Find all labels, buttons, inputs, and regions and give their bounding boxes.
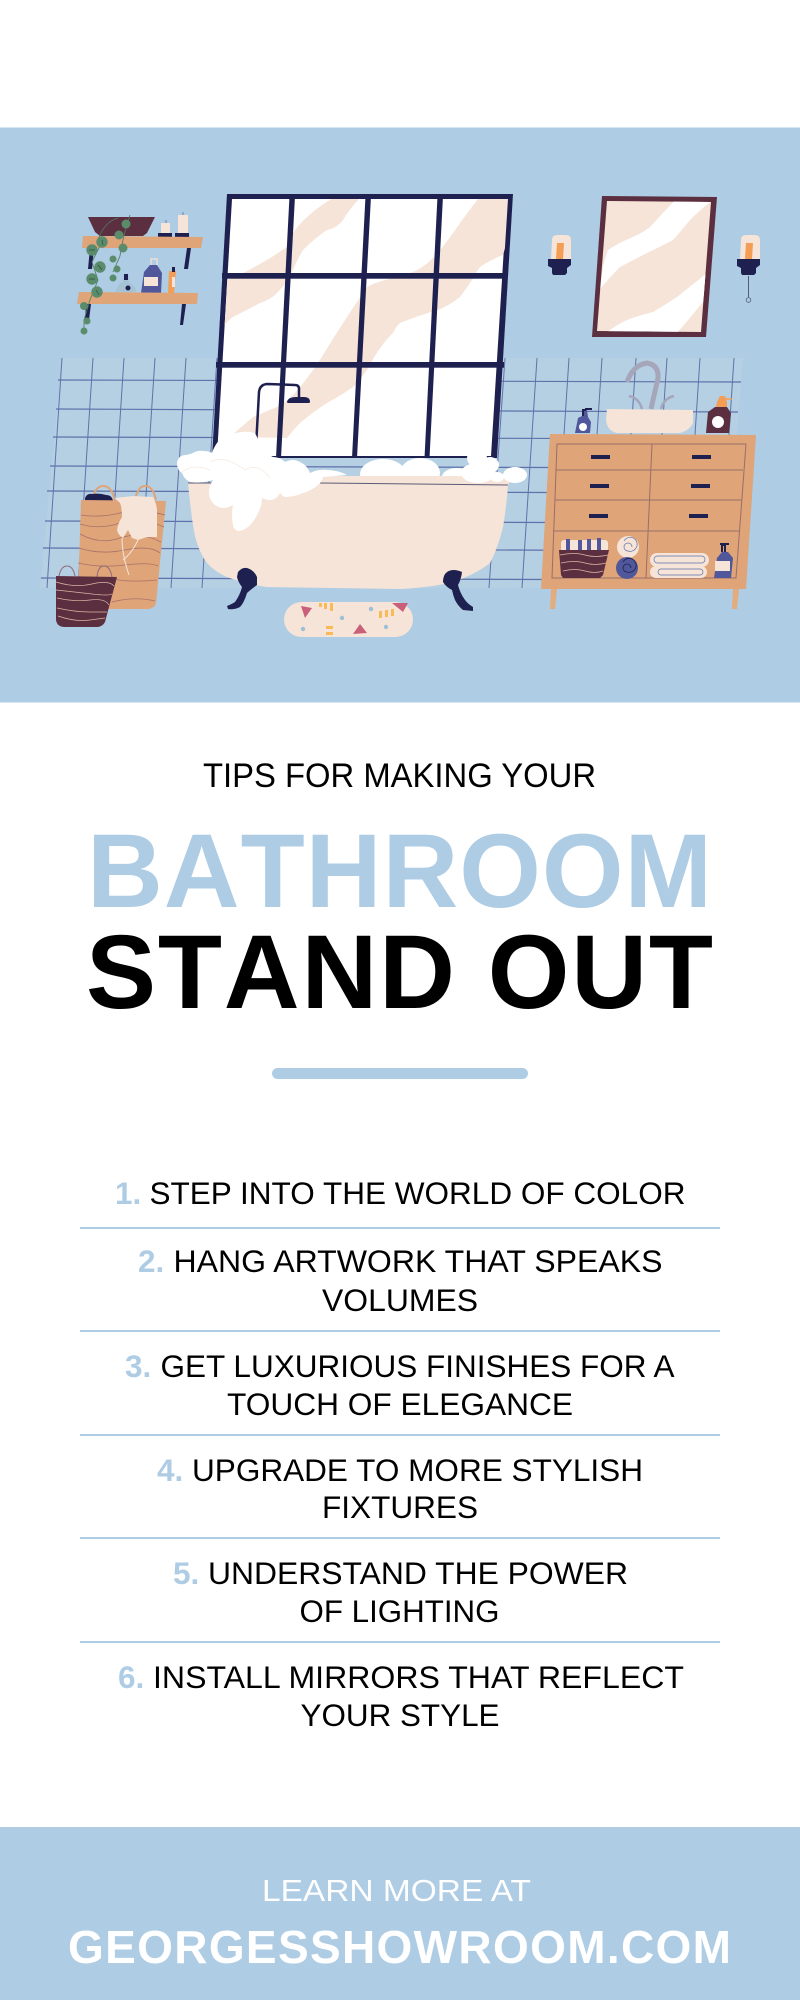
foam behind the rim (360, 449, 499, 489)
foam on the tub (177, 432, 527, 531)
tip 3 (125, 1348, 674, 1422)
wall mirror (592, 196, 717, 337)
footer label: LEARN MORE AT (262, 1873, 531, 1908)
faucet (627, 363, 674, 409)
footer website: GEORGESSHOWROOM.COM (68, 1921, 731, 1973)
tip 2: VOLUMES (322, 1282, 478, 1318)
tip 1: 1. (115, 1175, 141, 1211)
large soap dispenser (706, 396, 732, 433)
tip 5: OF LIGHTING (300, 1593, 500, 1629)
tip 4: FIXTURES (322, 1489, 478, 1525)
tip 5 (173, 1555, 628, 1629)
sink basin (606, 409, 693, 433)
shower head and pipe (256, 384, 310, 447)
tip 5: 5. (173, 1555, 199, 1591)
tip 4: 4. (157, 1452, 183, 1488)
small woven basket (56, 566, 117, 627)
wall shelves with plant and bottles (77, 212, 203, 334)
tip 6 (118, 1659, 684, 1733)
tip 6: 6. (118, 1659, 144, 1695)
lotion bottle (714, 544, 733, 578)
tip 6: YOUR STYLE (300, 1697, 500, 1733)
tip 4 (157, 1452, 643, 1525)
tip 1: STEP INTO THE WORLD OF COLOR (150, 1175, 686, 1211)
footer band (0, 1827, 800, 2000)
heading: stand out: STAND OUT (86, 914, 713, 1031)
tip 3: GET LUXURIOUS FINISHES FOR A (160, 1348, 674, 1384)
wall sconce right with pull chain (737, 235, 760, 302)
bathtub (188, 476, 512, 589)
folded towels (650, 553, 709, 578)
dresser (541, 434, 756, 609)
subtitle: TIPS FOR MAKING YOUR (203, 757, 596, 795)
tip 3: TOUCH OF ELEGANCE (227, 1386, 573, 1422)
bath rug (284, 602, 413, 637)
tip 2: HANG ARTWORK THAT SPEAKS (174, 1243, 662, 1279)
small soap dispenser (575, 409, 592, 433)
bathtub claw feet (227, 568, 473, 611)
laundry hamper (78, 486, 166, 609)
window with sky reflection (210, 194, 520, 458)
basket with striped towels (559, 538, 609, 578)
tip 4: UPGRADE TO MORE STYLISH (192, 1452, 643, 1488)
illustration panel: bathroom scene (0, 128, 800, 702)
wall sconce left (548, 235, 571, 275)
tip 6: INSTALL MIRRORS THAT REFLECT (153, 1659, 684, 1695)
heading: bathroom: BATHROOM (87, 813, 712, 930)
tip 2: 2. (138, 1243, 164, 1279)
rolled towels (616, 536, 639, 579)
tip 2 (138, 1243, 662, 1318)
tip 5: UNDERSTAND THE POWER (208, 1555, 628, 1591)
tip 3: 3. (125, 1348, 151, 1384)
divider bar (272, 1068, 528, 1079)
tiled wall (40, 358, 743, 588)
